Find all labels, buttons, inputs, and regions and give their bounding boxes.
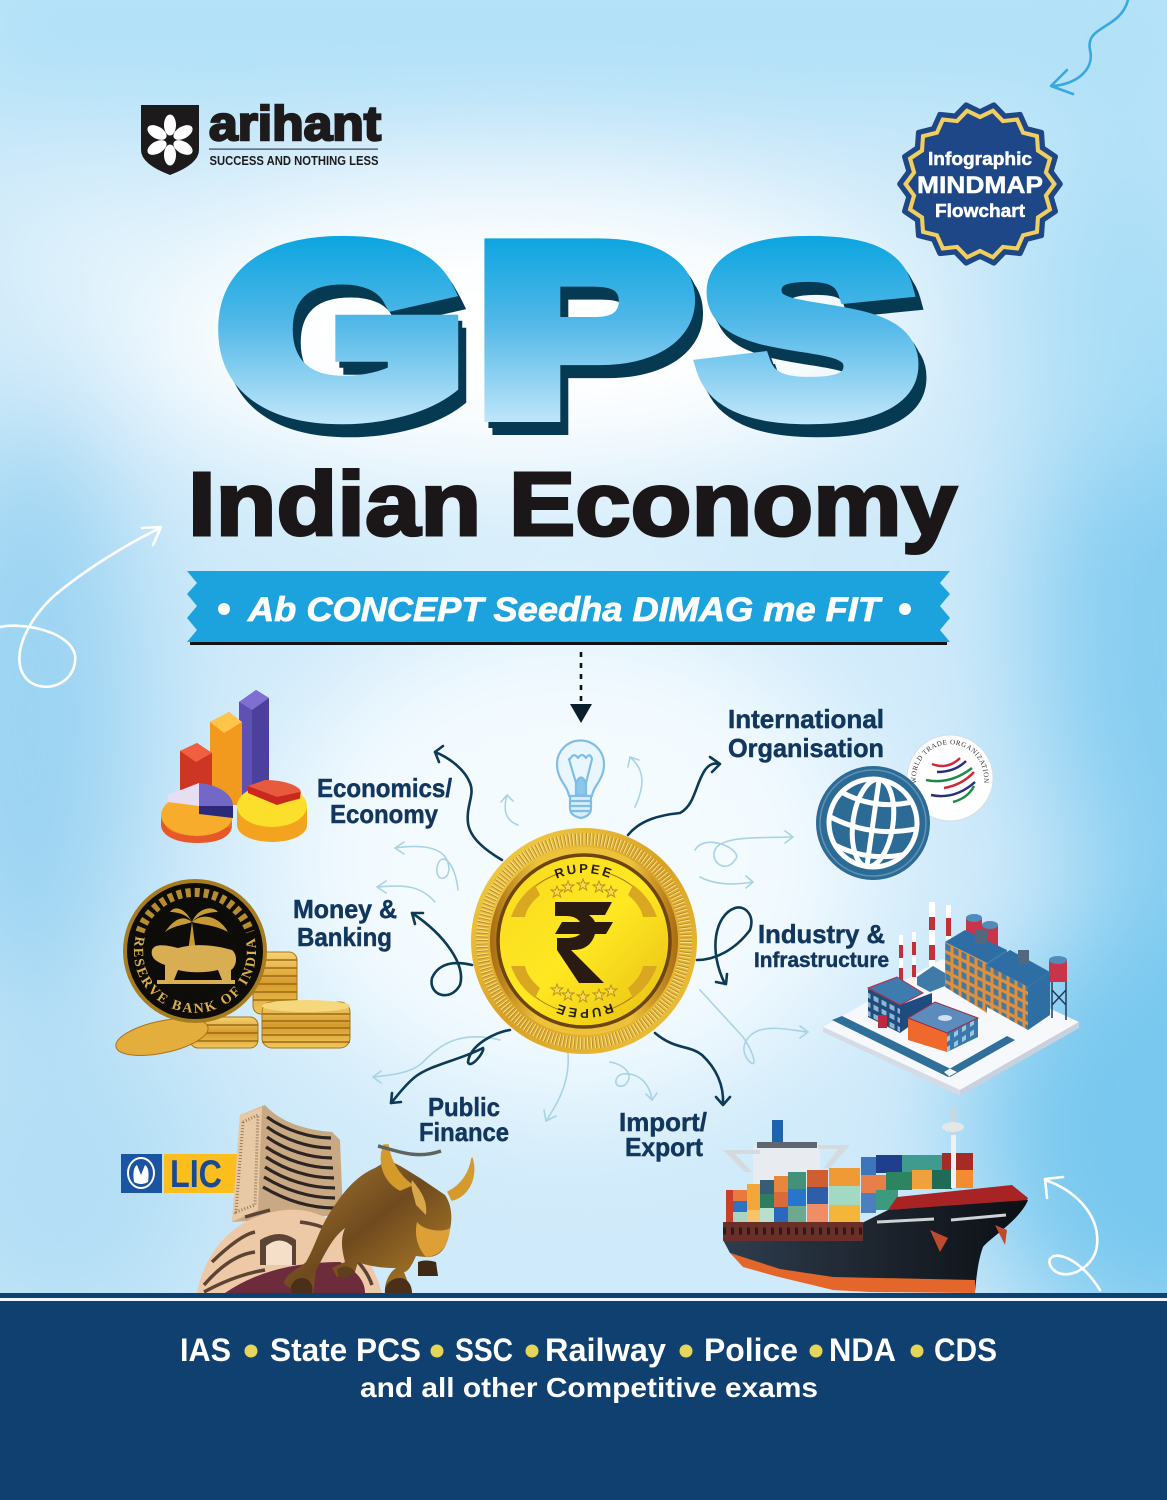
superstructure (723, 1120, 850, 1187)
label: Industry and Infrastructure: Industry & (758, 919, 885, 949)
label: International Organisation (728, 704, 884, 763)
title: GPS: G (224, 204, 467, 467)
exam list: State PCS (270, 1332, 421, 1368)
illustration: globe logo and WTO seal (816, 734, 994, 880)
tall building left (945, 930, 1007, 1013)
title: GPS: S (702, 198, 916, 461)
exam list: Police (704, 1332, 798, 1368)
title: GPS: G (220, 198, 463, 461)
label: Money and Banking: Money & (293, 894, 397, 924)
arrow: to Industry and Infrastructure (697, 907, 751, 984)
base (197, 1210, 382, 1293)
bow containers (861, 1153, 973, 1213)
title: GPS: P (482, 204, 695, 467)
icon: light bulb (557, 740, 604, 818)
bull (284, 1145, 474, 1293)
platform (823, 959, 1079, 1096)
seal disc (123, 879, 267, 1023)
title: GPS (220, 198, 924, 474)
exam list: SSC (455, 1332, 513, 1368)
title: GPS: S (710, 211, 924, 474)
icon: rupee symbol (555, 902, 613, 983)
label: Import/Export: Export (625, 1132, 703, 1162)
label: Import/Export: Import/ (619, 1107, 707, 1137)
central rupee coin (471, 828, 697, 1054)
gold coin stacks (113, 952, 350, 1062)
bars (180, 690, 269, 805)
hull lower band (730, 1253, 975, 1293)
label: Industry and Infrastructure (754, 919, 889, 972)
icon: shield with flower (141, 105, 199, 175)
water tanks (966, 914, 1067, 1020)
label: Money and Banking: Banking (297, 922, 392, 952)
brand name: arihant (209, 98, 381, 151)
hull (723, 1200, 1028, 1292)
badge: Infographic Mindmap Flowchart: Infographic (928, 149, 1032, 169)
seal disc: RESERVE BANK OF INDIA (134, 936, 256, 1013)
hull markings (723, 1215, 1007, 1252)
rupee word bottom: RUPEE (556, 1004, 614, 1018)
exam list (180, 1332, 997, 1368)
LIC sign (121, 1153, 238, 1196)
illustration: isometric factory (823, 902, 1079, 1096)
label: International Organisation: Organisation (728, 733, 884, 763)
small building left (868, 977, 932, 1033)
palm tree (165, 908, 228, 952)
logo: arihant (141, 98, 381, 175)
right pie (237, 780, 307, 842)
mast (942, 1107, 964, 1188)
exam list: NDA (829, 1332, 896, 1368)
globe (816, 766, 930, 880)
tagline: SUCCESS AND NOTHING LESS (210, 154, 378, 168)
title: GPS: P (478, 198, 691, 461)
left pie (161, 783, 233, 843)
label: Economics/Economy (317, 773, 452, 829)
label: Money and Banking (293, 894, 397, 952)
label: Public Finance: Finance (419, 1117, 509, 1147)
arrow: to Economics (435, 746, 502, 860)
small building right (908, 1002, 978, 1052)
WTO seal: WORLD TRADE ORGANIZATION (911, 740, 989, 784)
decorative arrow: top right swirl (1051, 0, 1128, 94)
tall building right (987, 950, 1050, 1030)
footer band (0, 1293, 1167, 1500)
illustration: stock exchange tower, LIC sign and bull (121, 1105, 474, 1293)
red forecastle (888, 1185, 1028, 1210)
rupee word top: RUPEE (554, 864, 612, 878)
label: Industry and Infrastructure: Infrastructure (754, 949, 889, 972)
label: International Organisation: International (728, 704, 884, 734)
stern containers (726, 1168, 860, 1223)
illustration: Reserve Bank of India seal with coins (115, 879, 350, 1056)
arrow: to Public Finance (391, 1030, 510, 1103)
title: Indian Economy: Indian Economy (188, 455, 957, 555)
arrow: dashed down to mindmap (570, 652, 592, 723)
label: Economics/Economy: Economy (330, 799, 438, 829)
title: GPS: G (228, 211, 471, 474)
badge: Infographic Mindmap Flowchart: Flowchart (935, 201, 1025, 221)
arrow: to International Organisation (628, 757, 720, 835)
arrow: to Money and Banking (412, 913, 472, 995)
exam sub-line: and all other Competitive exams (360, 1372, 818, 1403)
exam list: CDS (934, 1332, 997, 1368)
ribbon: slogan: Ab CONCEPT Seedha DIMAG me FIT (247, 591, 883, 629)
label: Economics/Economy: Economics/ (317, 773, 452, 803)
illustration: bar chart and pie charts (161, 690, 307, 843)
title: GPS: P (486, 211, 699, 474)
chimneys (899, 902, 951, 992)
ribbon: slogan (187, 571, 950, 645)
tower (232, 1105, 343, 1222)
decorative arrow: left white loop (0, 527, 161, 687)
faint swirl arrows (373, 757, 808, 1121)
badge: Infographic Mindmap Flowchart: MINDMAP (917, 172, 1043, 199)
label: Public Finance: Public (428, 1092, 500, 1122)
illustration: container ship (723, 1107, 1028, 1293)
decorative arrow: bottom right white loop (1045, 1177, 1100, 1290)
tiger (152, 945, 236, 980)
badge: Infographic Mindmap Flowchart (900, 105, 1060, 263)
stars (551, 879, 617, 1002)
arrow: to Import/Export (655, 1033, 730, 1105)
label: Import/Export (619, 1107, 707, 1162)
title: GPS: S (706, 204, 920, 467)
label: Public Finance (419, 1092, 509, 1147)
exam list: Railway (545, 1332, 666, 1368)
LIC sign: LIC (170, 1153, 222, 1196)
WTO seal (906, 734, 994, 822)
exam list: IAS (180, 1332, 231, 1368)
